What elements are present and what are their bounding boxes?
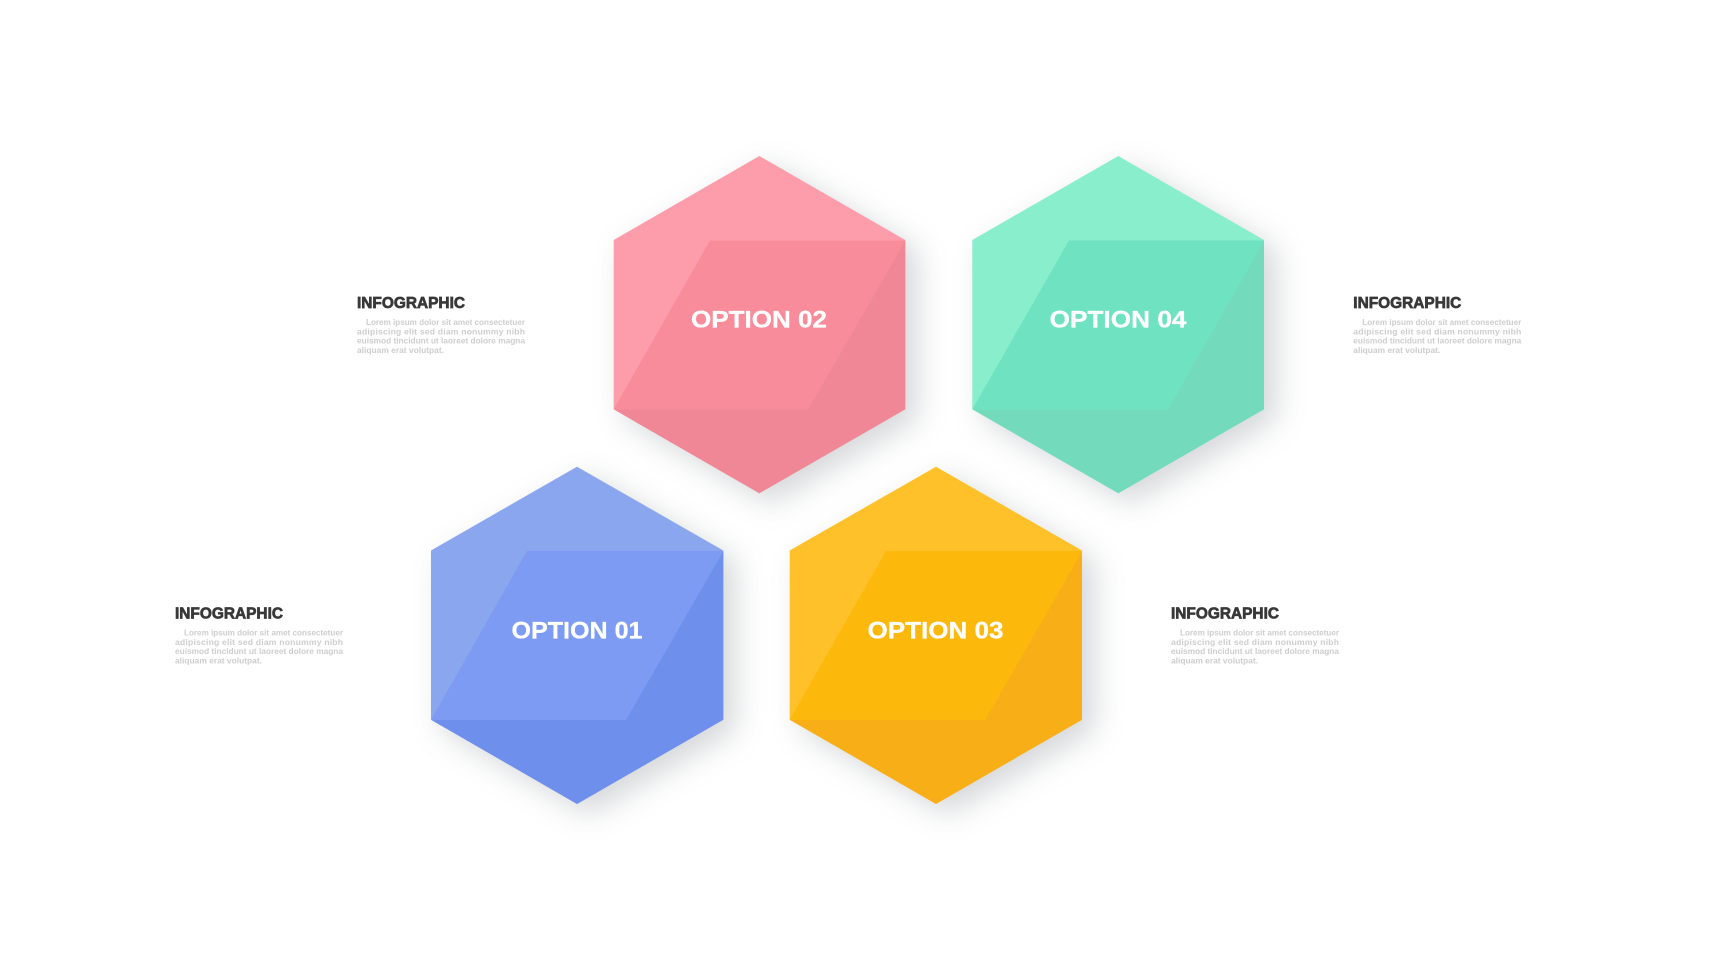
text block: option 03 description: INFOGRAPHIC [1171, 606, 1279, 622]
hexagon: option 02 [614, 156, 917, 503]
hexagon: option 04: OPTION 04 [1050, 306, 1187, 334]
text block: option 02 description: INFOGRAPHIC [357, 295, 465, 312]
text block: option 02 description: euismod tincidunt ut laoreet dolore magna [357, 336, 525, 346]
text block: option 01 description: euismod tincidunt ut laoreet dolore magna [175, 646, 343, 656]
hexagon: option 03 [790, 467, 1094, 814]
text block: option 04 description: aliquam erat volutpat. [1353, 345, 1440, 355]
text block: option 04 description: euismod tincidunt ut laoreet dolore magna [1353, 336, 1522, 346]
text block: option 01 description: adipiscing elit sed diam nonummy nibh [175, 637, 343, 647]
text block: option 02 description: Lorem ipsum dolor sit amet consectetuer [366, 317, 526, 327]
text block: option 03 description: aliquam erat volutpat. [1171, 656, 1258, 666]
text block: option 04 description: adipiscing elit sed diam nonummy nibh [1353, 326, 1521, 336]
text block: option 04 description: INFOGRAPHIC [1353, 295, 1462, 312]
text block: option 03 description: euismod tincidunt ut laoreet dolore magna [1171, 646, 1339, 656]
text block: option 03 description [1171, 606, 1340, 666]
text block: option 04 description: Lorem ipsum dolor sit amet consectetuer [1362, 317, 1522, 327]
hexagon: option 03: OPTION 03 [868, 618, 1004, 644]
hexagon: option 01 [431, 467, 735, 814]
text block: option 02 description: aliquam erat volutpat. [357, 345, 444, 355]
text block: option 01 description: INFOGRAPHIC [175, 606, 283, 622]
text block: option 04 description [1353, 295, 1522, 355]
hexagon: option 04 [972, 156, 1276, 503]
hexagon: option 02: OPTION 02 [691, 306, 827, 334]
hexagon: option 01: OPTION 01 [512, 618, 642, 644]
text block: option 01 description: Lorem ipsum dolor sit amet consectetuer [184, 628, 344, 638]
text block: option 01 description [175, 606, 344, 666]
text block: option 02 description [357, 295, 526, 355]
text block: option 03 description: Lorem ipsum dolor sit amet consectetuer [1180, 628, 1340, 638]
text block: option 01 description: aliquam erat volutpat. [175, 656, 262, 666]
text block: option 02 description: adipiscing elit sed diam nonummy nibh [357, 326, 525, 336]
text block: option 03 description: adipiscing elit sed diam nonummy nibh [1171, 637, 1339, 647]
